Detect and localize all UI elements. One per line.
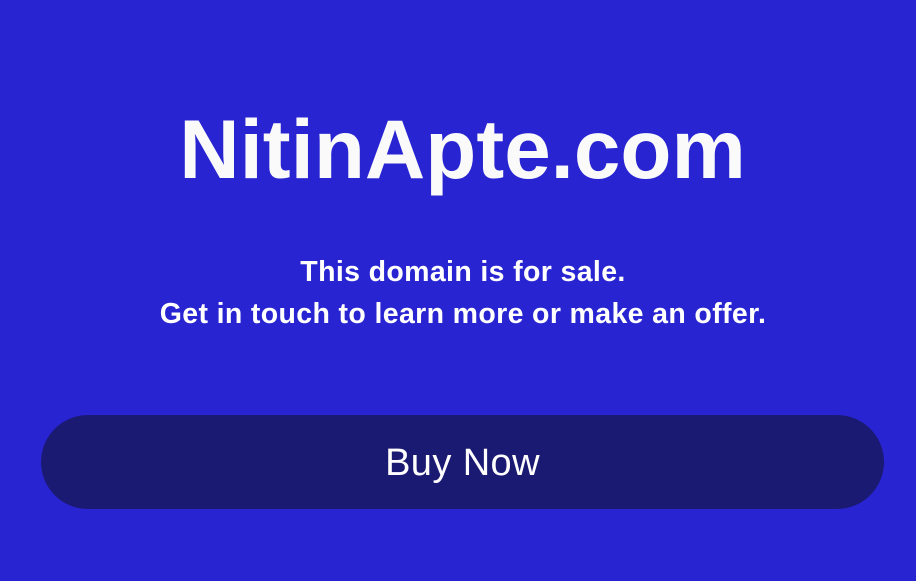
button: buy now [41, 415, 884, 509]
title: NitinApte.com [179, 102, 746, 196]
text block: sale message: This domain is for sale. [300, 256, 626, 288]
text block: sale message [160, 256, 766, 330]
button: buy now: Buy Now [385, 442, 540, 484]
text block: sale message: Get in touch to learn more or make an offer. [160, 298, 766, 330]
